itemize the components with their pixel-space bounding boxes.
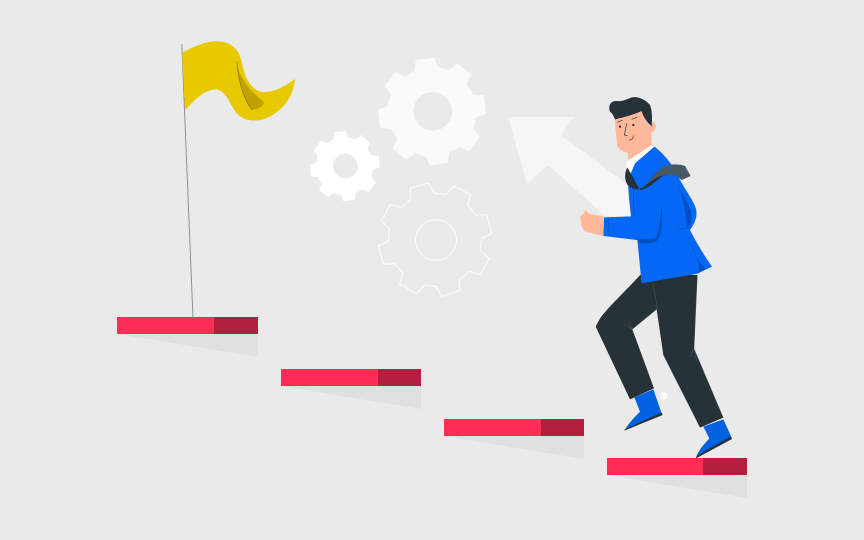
head bbox=[615, 111, 656, 153]
shirt collar bbox=[626, 145, 656, 180]
neck bbox=[628, 140, 653, 165]
shoe: front bbox=[696, 419, 732, 458]
gear: large solid bbox=[378, 58, 486, 166]
shoe: rear bbox=[624, 389, 663, 431]
gear: small solid bbox=[310, 131, 380, 201]
hand bbox=[580, 210, 604, 236]
man: legs and shoes bbox=[596, 273, 732, 458]
step 1 with flag base bbox=[117, 317, 258, 357]
tie bbox=[625, 164, 691, 190]
jacket bbox=[603, 147, 712, 283]
step 4 bbox=[607, 458, 747, 498]
jacket seams bbox=[608, 190, 687, 236]
flag bbox=[182, 41, 295, 318]
step 3 bbox=[444, 419, 584, 459]
arrow pointing up-left bbox=[508, 117, 632, 217]
step 2 bbox=[281, 369, 421, 409]
man: upper body bbox=[580, 97, 712, 283]
white dot bbox=[660, 392, 668, 399]
hair bbox=[609, 97, 652, 127]
face details bbox=[617, 117, 637, 140]
jacket shading bbox=[637, 187, 706, 274]
trousers bbox=[596, 273, 723, 428]
gear: outline bbox=[378, 183, 492, 296]
